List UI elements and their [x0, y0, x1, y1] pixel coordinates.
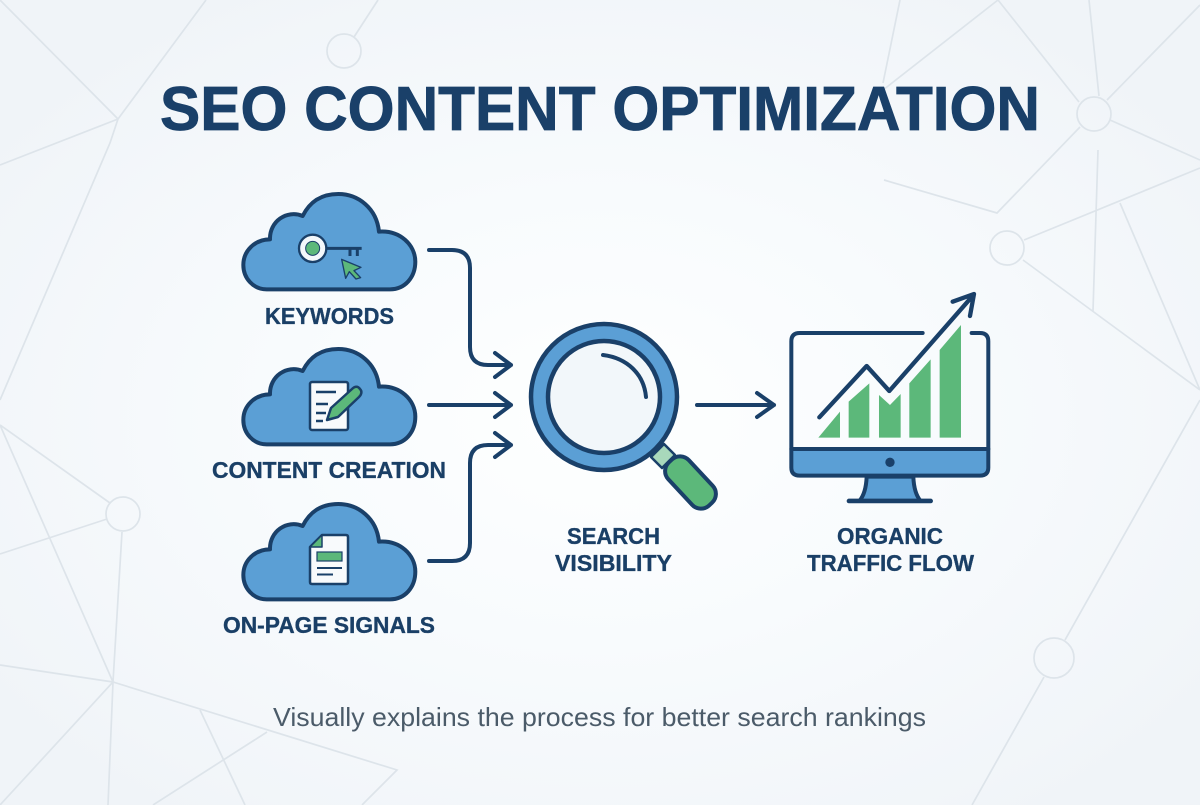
label: on-page signals: ON-PAGE SIGNALS — [223, 612, 435, 638]
arrow: keywords to search — [429, 250, 511, 377]
label: organic traffic flow — [807, 523, 974, 576]
icon: magnifying glass — [531, 324, 721, 514]
icon: monitor with growth chart — [791, 294, 988, 501]
cloud: keywords — [243, 194, 415, 289]
title: SEO CONTENT OPTIMIZATION — [160, 75, 1040, 144]
cloud: content creation — [243, 349, 415, 444]
label: keywords: KEYWORDS — [265, 303, 394, 329]
label: search visibility: SEARCH — [567, 523, 660, 549]
panel: search visibility — [531, 324, 721, 576]
label: search visibility — [555, 523, 672, 576]
label: search visibility: VISIBILITY — [555, 550, 672, 576]
arrow: content creation to search — [429, 393, 511, 417]
icon: page with signals — [310, 535, 348, 584]
icon: key and cursor — [299, 235, 362, 279]
cloud: on-page signals — [243, 504, 415, 599]
panel: organic traffic flow — [791, 294, 988, 576]
arrow: on-page signals to search — [429, 433, 511, 561]
label: content creation: CONTENT CREATION — [212, 457, 446, 483]
panel: content creation — [212, 349, 446, 483]
panel: keywords — [243, 194, 415, 329]
caption: Visually explains the process for better search rankings — [273, 702, 926, 732]
arrow: search to traffic — [697, 393, 774, 417]
label: organic traffic flow: ORGANIC — [837, 523, 943, 549]
label: organic traffic flow: TRAFFIC FLOW — [807, 550, 974, 576]
icon: document and pencil — [310, 382, 361, 430]
panel: on-page signals — [223, 504, 435, 638]
